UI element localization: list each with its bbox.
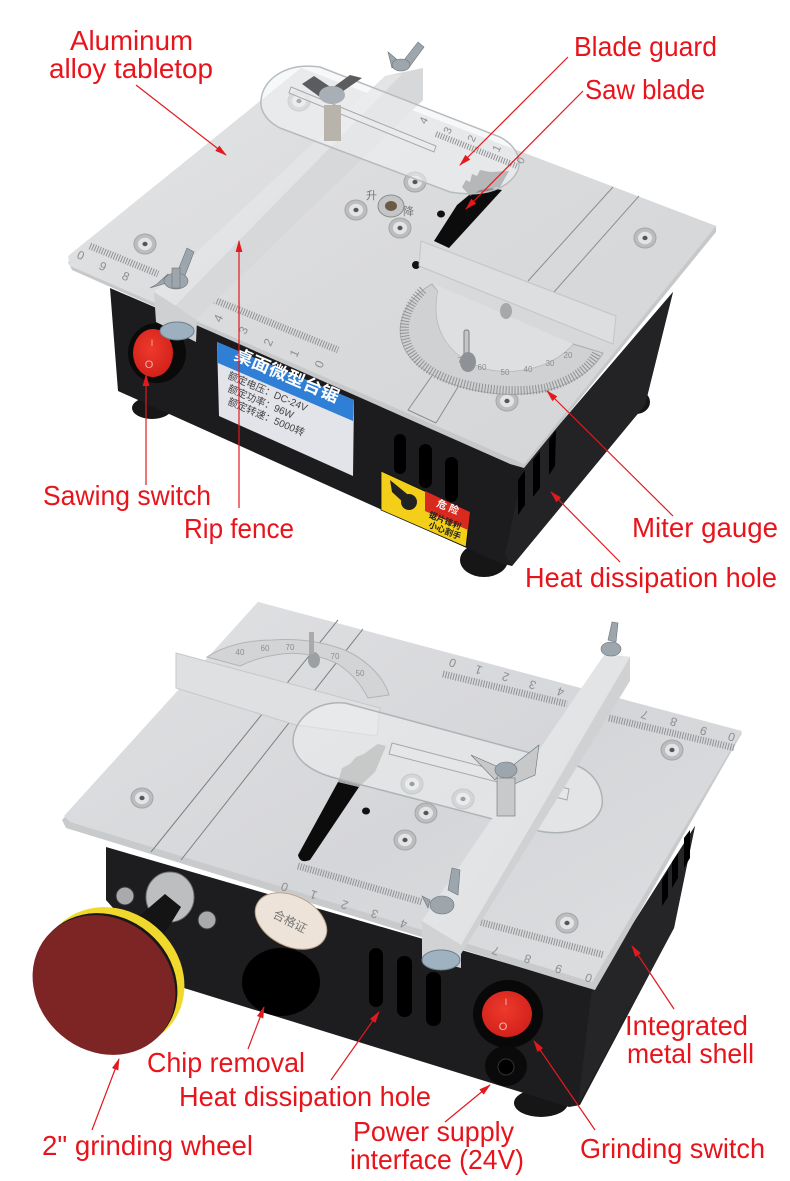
- table screws: [131, 740, 683, 933]
- miter gauge: 70: [458, 356, 467, 365]
- miter gauge: 70: [286, 643, 295, 652]
- rear feet: [132, 390, 650, 577]
- blade guard: 0: [515, 155, 528, 166]
- label: miter gauge: Miter gauge: [632, 512, 778, 543]
- table rulers: 2: [261, 336, 276, 348]
- miter gauge: 40: [236, 648, 245, 657]
- miter gauge: 60: [261, 644, 270, 653]
- labels: bottom: [42, 1010, 765, 1175]
- spec label: 额定转速：5000转: [226, 395, 307, 439]
- table rulers: 3: [527, 677, 538, 692]
- blade guard: 1: [491, 143, 504, 154]
- power switch: [128, 323, 186, 383]
- table rulers: 2: [500, 669, 511, 684]
- warning sticker: [381, 471, 470, 547]
- miter gauge: [400, 241, 616, 394]
- chip removal hole: [242, 948, 320, 1016]
- warning sticker: 危 险: [435, 497, 461, 517]
- miter gauge: 20: [564, 351, 573, 360]
- grinding wheel and shaft: [4, 872, 216, 1084]
- table rulers: 1: [473, 662, 484, 677]
- blade guard: 4: [418, 115, 431, 126]
- aluminum tabletop: [62, 602, 742, 990]
- table screws: [134, 91, 656, 411]
- label: grinding switch: Grinding switch: [580, 1133, 765, 1164]
- table rulers: 4: [555, 684, 566, 699]
- grinding switch: I: [505, 997, 507, 1007]
- blade guard: [293, 703, 602, 833]
- label: rip fence: Rip fence: [184, 513, 294, 544]
- table screws: 升: [366, 189, 377, 202]
- table screws: 降: [403, 204, 414, 218]
- table rulers: 4: [398, 916, 409, 931]
- table rulers: 2: [339, 897, 350, 912]
- product photo: table saw, top view: [68, 42, 716, 577]
- table rulers: 8: [120, 269, 132, 284]
- table rulers: 9: [553, 961, 564, 976]
- miter gauge: 30: [546, 359, 555, 368]
- power switch: O: [145, 359, 154, 371]
- rip fence: [422, 655, 630, 970]
- table rulers: 8: [522, 951, 533, 966]
- miter gauge: [176, 632, 389, 736]
- saw blade: [434, 170, 509, 248]
- grinding switch: O: [499, 1021, 508, 1033]
- table rulers: 0: [447, 655, 458, 670]
- arrows: top: [136, 57, 673, 562]
- arrows: bottom: [92, 946, 674, 1130]
- black body: [110, 288, 673, 566]
- blade guard: 3: [442, 125, 455, 136]
- label: saw blade: Saw blade: [585, 74, 705, 105]
- label: interface 24V: interface (24V): [350, 1144, 524, 1175]
- power switch: I: [151, 338, 153, 348]
- spec label: [217, 342, 354, 476]
- table rulers: 7: [639, 707, 650, 722]
- table rulers: 4: [211, 312, 226, 324]
- table rulers: 0: [75, 248, 87, 263]
- label: heat dissipation hole: Heat dissipation hole: [525, 562, 777, 593]
- label: alloy tabletop line: alloy tabletop: [49, 53, 213, 84]
- table rulers: 1: [287, 347, 302, 359]
- certificate badge: [246, 881, 336, 961]
- front vents: [394, 434, 458, 502]
- black body: [106, 826, 695, 1107]
- warning sticker: 小心割手: [427, 520, 463, 542]
- spec label: 额定电压：DC-24V: [226, 369, 310, 414]
- side vents: [518, 430, 556, 515]
- rip fence: [154, 68, 423, 342]
- label: sawing switch: Sawing switch: [43, 480, 211, 511]
- table rulers: 0: [726, 729, 737, 744]
- grinding switch: [473, 980, 543, 1048]
- side vents: [662, 830, 690, 906]
- rear vents: [369, 948, 441, 1026]
- power jack: [485, 1046, 527, 1086]
- blade guard: [261, 66, 528, 194]
- miter gauge: 70: [331, 652, 340, 661]
- table rulers: 0: [312, 358, 327, 370]
- table rulers: [279, 655, 737, 985]
- miter gauge: 40: [524, 365, 533, 374]
- wing nuts: [150, 42, 424, 289]
- label: power supply: Power supply: [353, 1116, 514, 1147]
- label: blade guard: Blade guard: [574, 31, 717, 62]
- spec label: 额定功率：96W: [226, 382, 296, 422]
- aluminum tabletop: [68, 68, 716, 468]
- table rulers: [75, 246, 338, 370]
- label: grinding wheel: 2" grinding wheel: [42, 1130, 253, 1161]
- certificate badge: 合格证: [271, 906, 310, 936]
- foot: [514, 1089, 568, 1117]
- label: aluminum alloy tabletop: Aluminum: [70, 25, 193, 56]
- miter gauge: 50: [501, 368, 510, 377]
- labels: top: [43, 25, 778, 593]
- wing nuts: [422, 622, 621, 914]
- table rulers: 9: [97, 259, 109, 274]
- table rulers: 3: [369, 906, 380, 921]
- table rulers: 7: [490, 943, 501, 958]
- table rulers: 0: [583, 970, 594, 985]
- table rulers: 1: [308, 887, 319, 902]
- blade guard: 2: [466, 133, 479, 144]
- table rulers: 0: [279, 879, 290, 894]
- label: chip removal: Chip removal: [147, 1047, 305, 1078]
- table rulers: 8: [668, 714, 679, 729]
- table rulers: 3: [236, 324, 251, 336]
- miter gauge: 60: [478, 363, 487, 372]
- miter gauge: 50: [356, 669, 365, 678]
- warning sticker: 锯片锋利: [427, 510, 463, 532]
- label: integrated: Integrated: [625, 1010, 748, 1041]
- label: heat dissipation hole: Heat dissipation hole: [179, 1081, 431, 1112]
- table rulers: 9: [698, 723, 709, 738]
- product photo: table saw, rear view: [4, 602, 742, 1117]
- label: metal shell: metal shell: [627, 1038, 754, 1069]
- spec label: 桌面微型台锯: [231, 344, 342, 406]
- saw blade and slot: [298, 744, 386, 861]
